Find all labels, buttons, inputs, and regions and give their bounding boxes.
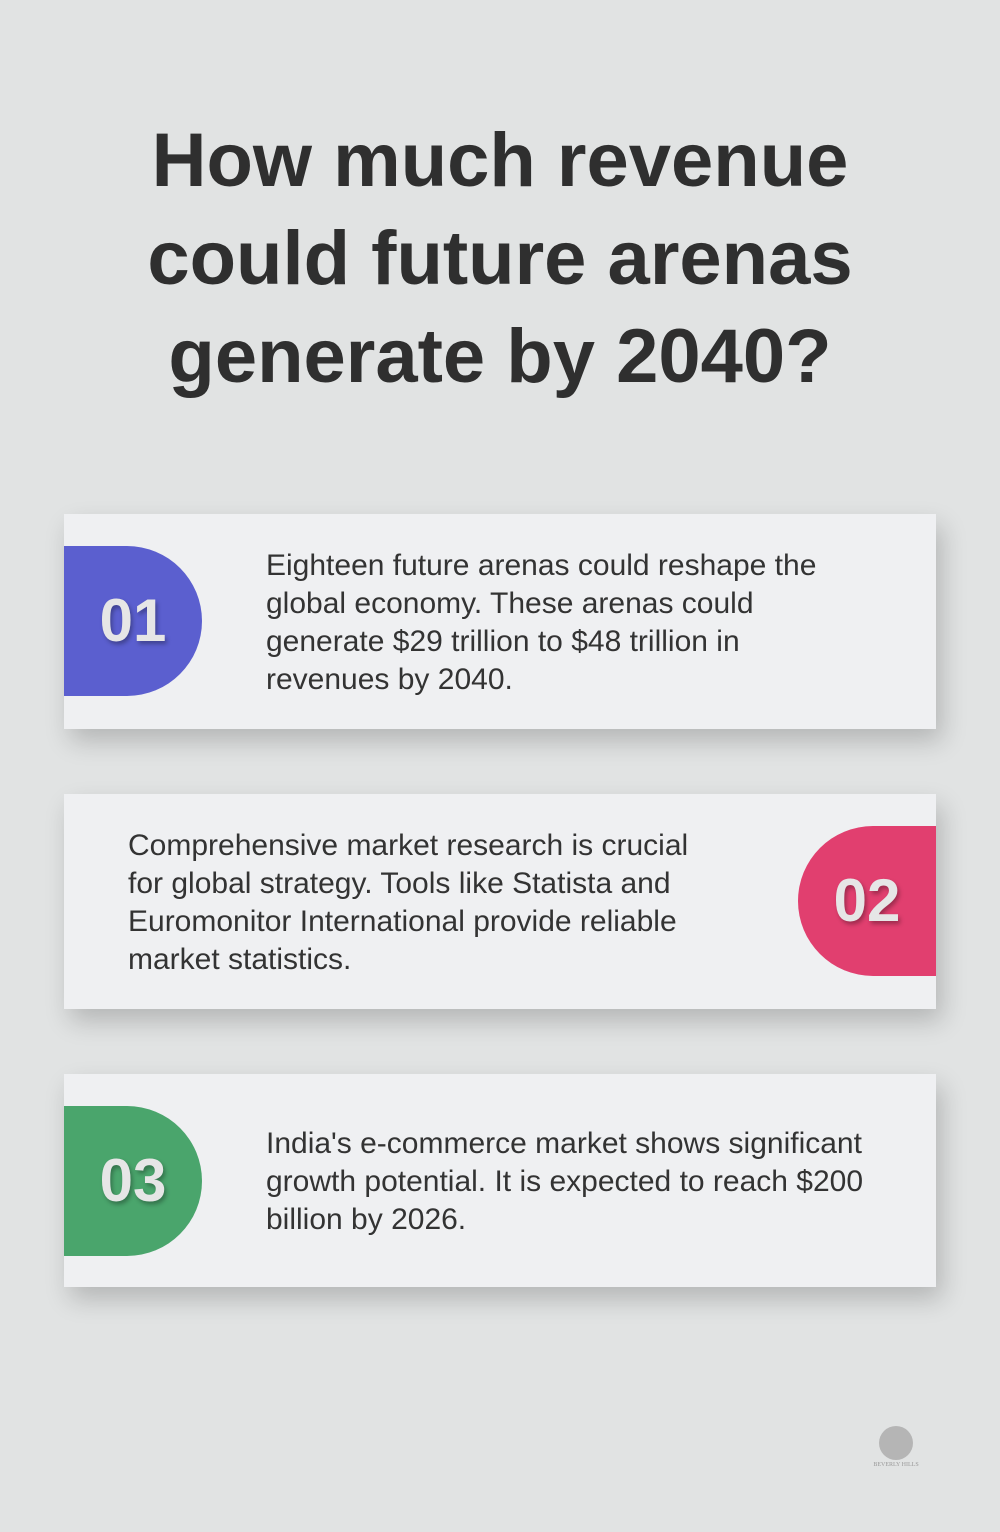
badge 03 — [64, 1106, 202, 1256]
panel: 02 — [64, 794, 936, 1009]
text 01: Eighteen future arenas could reshape the — [266, 549, 816, 582]
text 02: Comprehensive market research is crucial — [128, 829, 688, 862]
panel: 03 — [64, 1074, 936, 1287]
badge 03: 03 — [100, 1147, 166, 1214]
title: could future arenas — [147, 216, 853, 301]
text 01: revenues by 2040. — [266, 663, 513, 696]
text 02: Euromonitor International provide reliable — [128, 905, 677, 938]
text 03: growth potential. It is expected to reach $200 — [266, 1165, 863, 1198]
logo: BEVERLY HILLS — [873, 1462, 919, 1468]
text 01: generate $29 trillion to $48 trillion in — [266, 625, 740, 658]
title: How much revenue — [152, 118, 848, 203]
text 03: billion by 2026. — [266, 1203, 466, 1236]
badge 01 — [64, 546, 202, 696]
panel: 01 — [64, 514, 936, 729]
text 03: India's e-commerce market shows significant — [266, 1127, 862, 1160]
title — [147, 118, 853, 399]
text 02: market statistics. — [128, 943, 351, 976]
badge 02 — [798, 826, 936, 976]
title: generate by 2040? — [168, 314, 832, 399]
badge 01: 01 — [100, 587, 166, 654]
text 01 — [266, 549, 816, 696]
text 02: for global strategy. Tools like Statista and — [128, 867, 671, 900]
text 02 — [128, 829, 688, 976]
badge 02: 02 — [834, 867, 900, 934]
text 03 — [266, 1127, 863, 1236]
logo — [873, 1426, 919, 1468]
text 01: global economy. These arenas could — [266, 587, 754, 620]
